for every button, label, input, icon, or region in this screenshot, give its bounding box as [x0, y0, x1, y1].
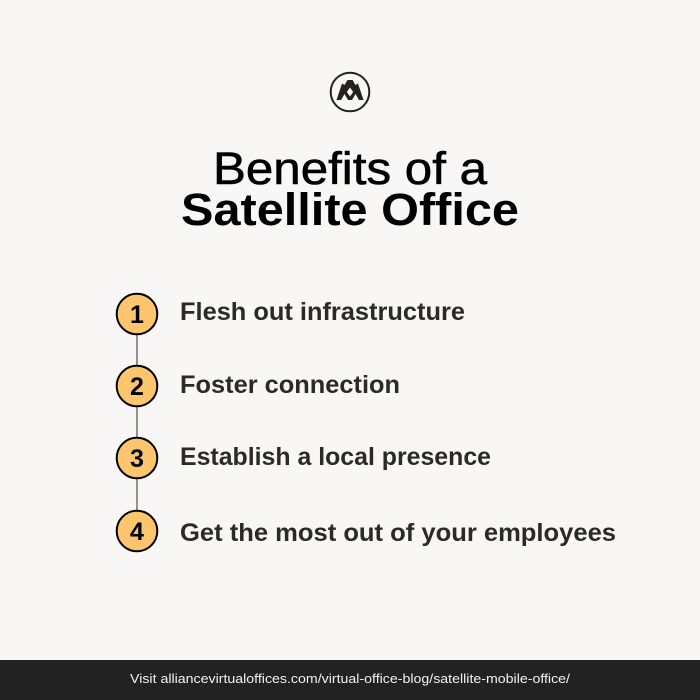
footer bar: Visit alliancevirtualoffices.com/virtual-office-blog/satellite-mobile-office/: [130, 671, 570, 686]
item 1: [117, 294, 465, 334]
item 3: Establish a local presence: [180, 443, 491, 471]
title: Satellite Office: [181, 184, 519, 235]
item 2: 2: [130, 373, 144, 401]
title: Benefits of a: [213, 143, 488, 194]
icon: company logo: [331, 73, 369, 111]
item 1: Flesh out infrastructure: [180, 298, 465, 326]
connector lines: [136, 334, 138, 511]
item 1: 1: [130, 301, 144, 329]
item 4: Get the most out of your employees: [180, 519, 616, 547]
item 2: Foster connection: [180, 371, 400, 399]
item 4: [117, 511, 616, 551]
title: [181, 143, 519, 235]
item 4: 4: [130, 518, 144, 546]
footer bar: [0, 660, 700, 700]
item 3: 3: [130, 445, 144, 473]
item 2: [117, 366, 400, 406]
numbered benefits list: [117, 294, 616, 551]
item 3: [117, 438, 491, 478]
